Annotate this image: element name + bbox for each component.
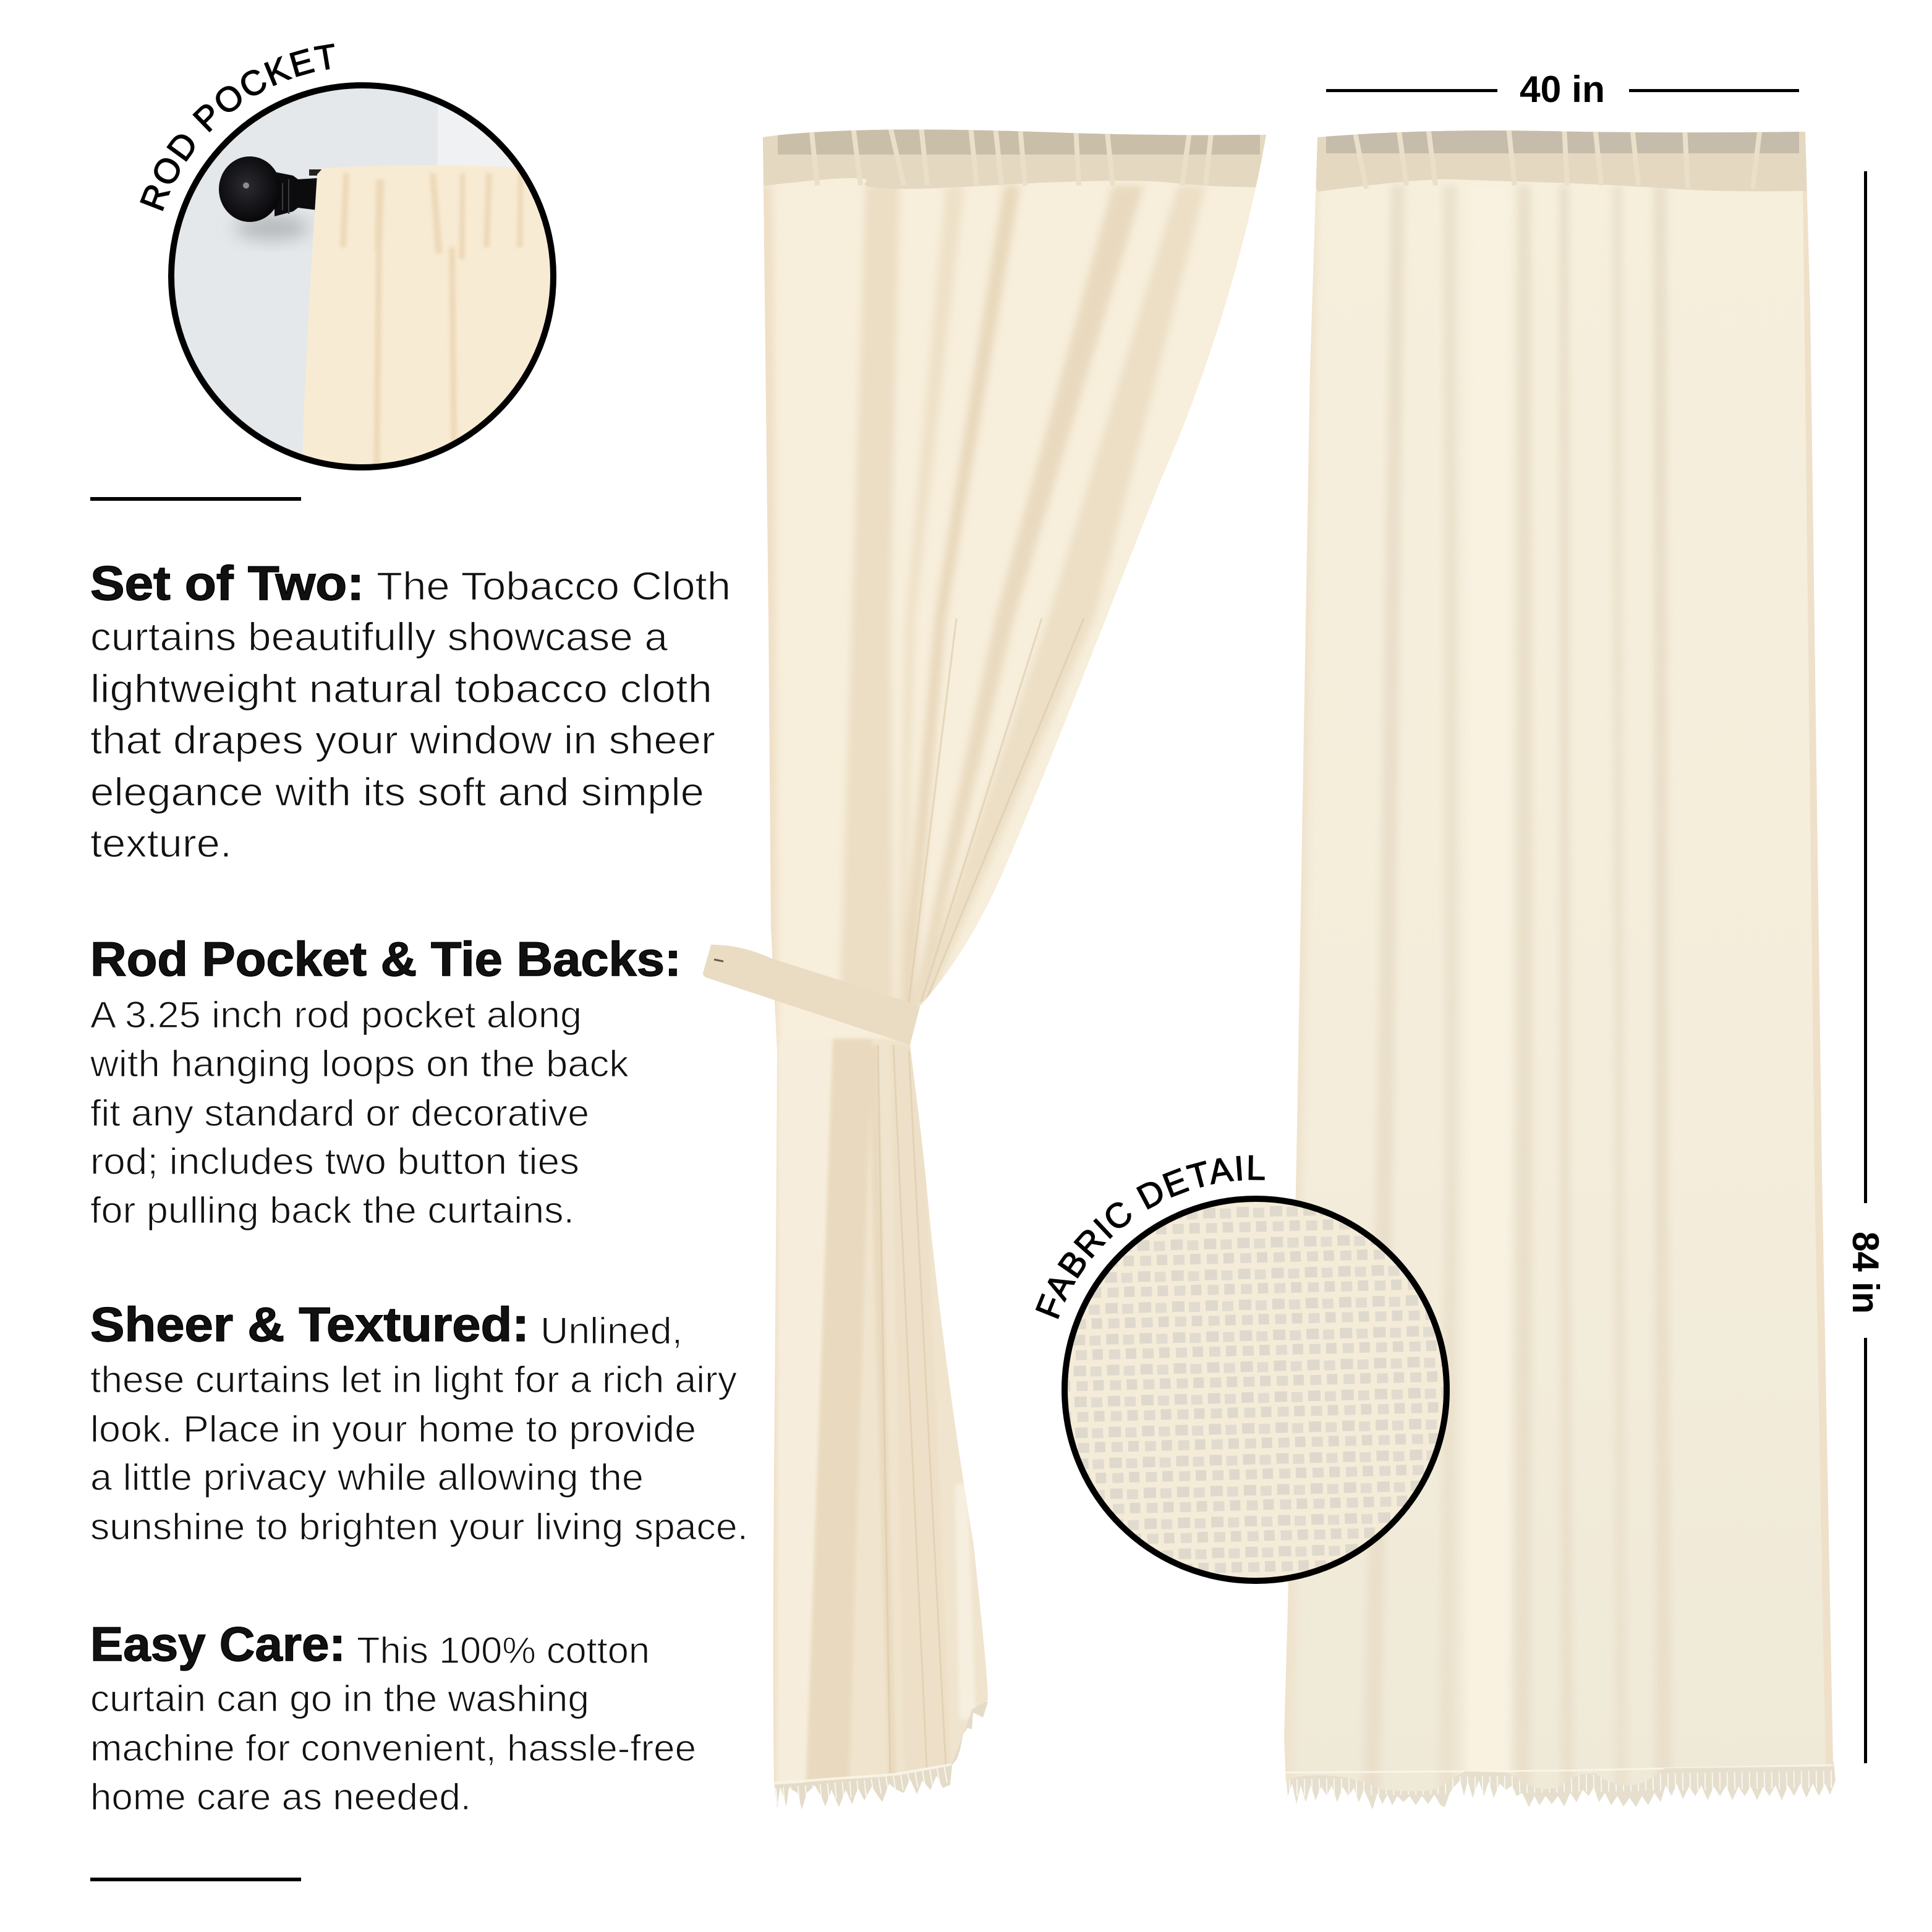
body: sunshine to brighten your living space.: [90, 1506, 748, 1547]
curtain rod finial: [219, 156, 340, 222]
body: rod; includes two button ties: [90, 1141, 579, 1182]
woven fabric swatch: [1051, 1187, 1459, 1595]
circle inset: rod pocket: [161, 80, 569, 482]
body: a little privacy while allowing the: [90, 1457, 644, 1498]
body: that drapes your window in sheer: [90, 718, 715, 762]
body: for pulling back the curtains.: [90, 1189, 574, 1231]
curtain folds: [1274, 185, 1672, 1793]
text block: easy care: [90, 1617, 696, 1818]
hem line: [1285, 1765, 1833, 1772]
body: [90, 994, 629, 1231]
height dimension: 84 in: 84 in: [1845, 1232, 1886, 1314]
body: elegance with its soft and simple: [90, 770, 704, 814]
body: This 100% cotton: [357, 1630, 650, 1671]
heading: Rod Pocket & Tie Backs:: [90, 932, 681, 986]
header pleats: [811, 127, 1212, 185]
body: look. Place in your home to provide: [90, 1408, 696, 1450]
inset photo: [161, 80, 569, 482]
body: these curtains let in light for a rich airy: [90, 1359, 737, 1400]
lower gathered section: [778, 1039, 1014, 1793]
header pleats: [1354, 127, 1760, 189]
divider: [90, 497, 301, 501]
right curtain edge strip: [1802, 133, 1836, 1768]
body: [90, 564, 731, 866]
curved label: fabric detail: FABRIC DETAIL: [1035, 1155, 1265, 1319]
text block: rod pocket and tie backs: [90, 932, 681, 1231]
body: with hanging loops on the back: [90, 1043, 629, 1084]
circle inset: fabric detail: [1051, 1187, 1459, 1595]
body: The Tobacco Cloth: [377, 564, 731, 608]
pleated folds: [754, 185, 1206, 1793]
image: right curtain: [1274, 117, 1849, 1810]
heading: Easy Care:: [90, 1617, 346, 1671]
body: [90, 1310, 748, 1547]
rod pocket header: [1298, 117, 1830, 192]
right curtain body: [1274, 117, 1849, 1799]
body: machine for convenient, hassle-free: [90, 1727, 696, 1769]
height dimension: 84 in: [1845, 171, 1886, 1763]
width dimension: 40 in: [1326, 69, 1799, 110]
rod pocket header: [742, 117, 1298, 189]
fold creases: [878, 618, 1084, 1781]
left curtain fringe: [774, 1694, 988, 1810]
curtain in inset: [302, 165, 569, 482]
heading: Sheer & Textured:: [90, 1297, 529, 1351]
heading: Set of Two:: [90, 556, 364, 610]
text block: sheer and textured: [90, 1297, 748, 1547]
buttonhole: [714, 960, 723, 961]
body: texture.: [90, 821, 232, 866]
rod pocket band: [1326, 124, 1799, 153]
body: Unlined,: [540, 1310, 683, 1351]
inset ring: [1065, 1199, 1447, 1581]
rod pocket band: [778, 124, 1260, 155]
right curtain fringe: [1286, 1762, 1836, 1810]
body: lightweight natural tobacco cloth: [90, 666, 712, 711]
curved label: rod pocket: ROD POCKET: [140, 43, 334, 211]
width dimension: 40 in: 40 in: [1520, 69, 1605, 110]
inset ring: [171, 85, 553, 467]
divider: [90, 1878, 301, 1881]
body: [90, 1630, 696, 1818]
text block: set of two: [90, 556, 731, 866]
body: curtains beautifully showcase a: [90, 615, 668, 659]
image: left curtain with tie back: [703, 117, 1298, 1810]
body: fit any standard or decorative: [90, 1092, 589, 1134]
hem line: [774, 1764, 952, 1783]
left curtain body: [763, 130, 1266, 1785]
body: curtain can go in the washing: [90, 1678, 589, 1719]
body: A 3.25 inch rod pocket along: [90, 994, 582, 1036]
body: home care as needed.: [90, 1776, 471, 1818]
tie back band: [703, 945, 920, 1045]
